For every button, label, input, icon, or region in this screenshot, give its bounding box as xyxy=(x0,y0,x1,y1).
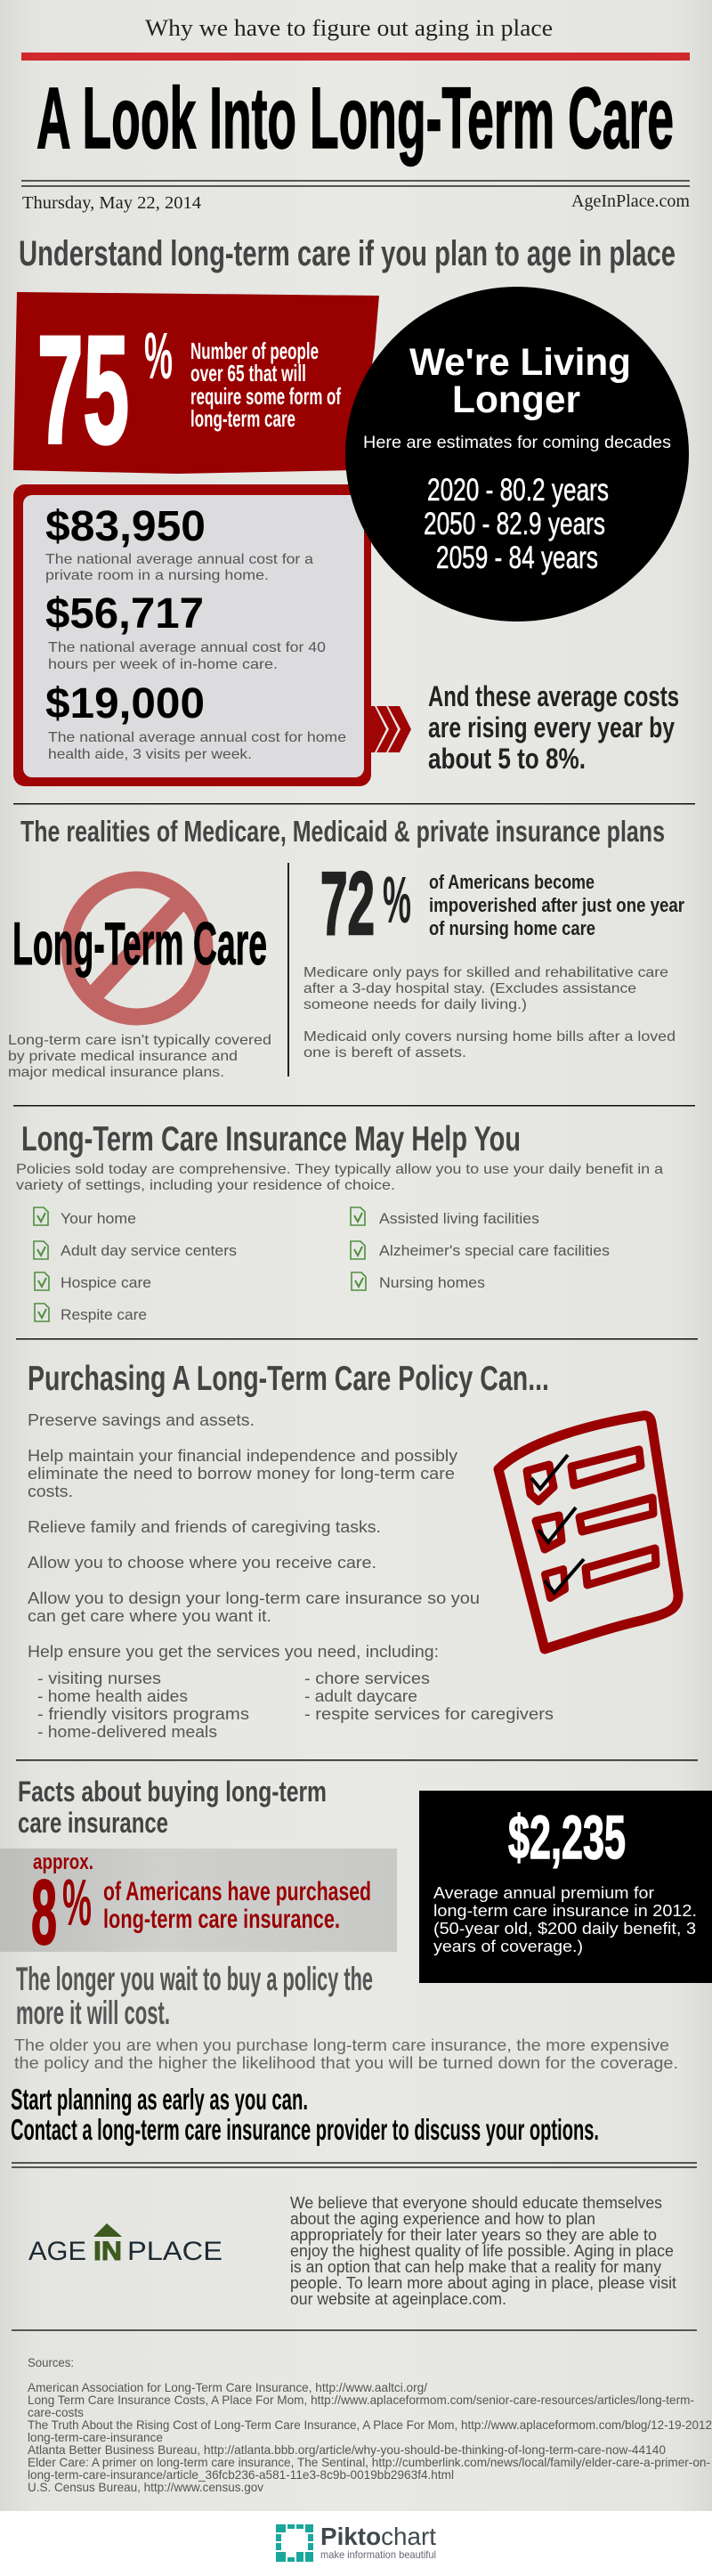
text: benefits: Allow you to choose where you receive care. xyxy=(28,1554,376,1572)
description: long-term care xyxy=(190,405,295,432)
heading: the longer you wait: more it will cost. xyxy=(16,1995,170,2031)
arrow: chevrons xyxy=(371,706,411,752)
heading: the longer you wait xyxy=(16,1961,373,2031)
item: nursing homes xyxy=(352,1272,485,1291)
panel: 8 percent xyxy=(0,1849,397,1963)
percent sign: % xyxy=(62,1865,92,1939)
heading: facts: care insurance xyxy=(18,1807,168,1839)
item: assisted living: Assisted living facilities xyxy=(379,1210,539,1227)
item: nursing homes: Nursing homes xyxy=(379,1274,485,1291)
logo: age in place: IN xyxy=(93,2237,122,2266)
heading: the longer you wait: The longer you wait to buy a policy the xyxy=(16,1961,373,1997)
text: benefits: Help ensure you get the services you need, including: xyxy=(28,1643,439,1661)
sources: Elder Care: A primer on long-term care insurance, The Sentinal, http://cumberlink.com/news/local/family/elder-care-a-primer-on- xyxy=(28,2455,710,2469)
sources: Sources: xyxy=(28,2355,74,2369)
text: benefits: Help maintain your financial independence and possibly xyxy=(28,1447,457,1465)
text: benefits: Preserve savings and assets. xyxy=(28,1411,255,1429)
stat text: of nursing home care xyxy=(429,917,595,939)
text: medicaid: one is bereft of assets. xyxy=(303,1045,466,1060)
logo: age in place: PLACE xyxy=(127,2237,222,2266)
cost 1 text: private room in a nursing home. xyxy=(45,568,269,583)
cost 3: $19,000 xyxy=(45,680,205,727)
text: about: our website at ageinplace.com. xyxy=(290,2290,506,2308)
item: respite xyxy=(35,1304,147,1323)
heading: insurance may help: Long-Term Care Insurance May Help You xyxy=(21,1120,521,1158)
logo: age in place: AGE xyxy=(28,2237,86,2266)
text: the older you are: The older you are when you purchase long-term care insurance, the more expensive xyxy=(14,2036,669,2054)
list: services left: - home health aides xyxy=(37,1687,188,1705)
item: alzheimer's: Alzheimer's special care facilities xyxy=(379,1242,610,1259)
cost 3 text: health aide, 3 visits per week. xyxy=(48,747,252,762)
text: the older you are xyxy=(14,2036,678,2072)
number 72: 72 xyxy=(320,854,375,954)
cost 1 text: The national average annual cost for a xyxy=(45,552,313,567)
stat text: of Americans become xyxy=(429,871,595,893)
cost 2: $56,717 xyxy=(45,590,204,638)
stat text: of Americans have purchased xyxy=(103,1877,371,1906)
panel: 75 percent: % xyxy=(144,319,173,393)
estimates xyxy=(424,473,609,575)
stat text xyxy=(103,1877,371,1934)
item: hospice: Hospice care xyxy=(61,1274,151,1291)
list: services left: - friendly visitors programs xyxy=(37,1705,249,1723)
text: medicare: Medicare only pays for skilled and rehabilitative care xyxy=(303,965,668,980)
label: long-term care: Long-Term Care xyxy=(12,910,267,978)
kicker: Why we have to figure out aging in place xyxy=(145,15,553,41)
text: about: We believe that everyone should educate themselves xyxy=(290,2194,662,2212)
description: Number of people xyxy=(190,337,319,364)
piktochart tagline: make information beautiful xyxy=(320,2548,436,2561)
list: services left: - home-delivered meals xyxy=(37,1723,217,1741)
call to action: Start planning as early as you can. xyxy=(11,2083,308,2116)
text: about: is an option that can help make that a reality for many xyxy=(290,2258,661,2276)
text: medicare xyxy=(303,965,668,1012)
heading: facts: Facts about buying long-term xyxy=(18,1776,327,1808)
sources xyxy=(28,2355,712,2494)
description xyxy=(190,337,341,432)
estimates: 2059 - 84 years xyxy=(436,540,598,575)
premium text: long-term care insurance in 2012. xyxy=(433,1902,697,1920)
description: require some form of xyxy=(190,383,341,410)
sources: American Association for Long-Term Care Insurance, http://www.aaltci.org/ xyxy=(28,2380,427,2394)
cost 2 text xyxy=(48,640,326,672)
piktochart wordmark: Piktochart xyxy=(320,2523,436,2550)
circle heading: Longer xyxy=(452,378,580,421)
estimates: 2020 - 80.2 years xyxy=(427,473,609,508)
list: services right: - adult daycare xyxy=(304,1687,417,1705)
text: rising costs: about 5 to 8%. xyxy=(428,743,586,775)
premium text: (50-year old, $200 daily benefit, 3 xyxy=(433,1920,696,1938)
checklist: settings xyxy=(34,1207,610,1323)
text: about xyxy=(290,2194,676,2308)
sources: U.S. Census Bureau, http://www.census.gov xyxy=(28,2480,263,2494)
stat: 72 percent xyxy=(320,854,684,954)
premium text: years of coverage.) xyxy=(433,1938,583,1955)
sources: Atlanta Better Business Bureau, http://atlanta.bbb.org/article/why-you-should-be-thinking-of-long-term-care-now-44140 xyxy=(28,2442,666,2457)
item: hospice xyxy=(35,1272,151,1291)
text: not covered xyxy=(8,1033,271,1080)
call to action xyxy=(11,2083,599,2146)
text: not covered: by private medical insurance and xyxy=(8,1049,238,1064)
text: about: appropriately for their later years so they are able to xyxy=(290,2226,657,2244)
text: not covered: Long-term care isn't typically covered xyxy=(8,1033,271,1048)
text: rising costs xyxy=(428,680,679,775)
premium text xyxy=(433,1884,697,1955)
logo: age in place xyxy=(28,2223,222,2266)
text: benefits: can get care where you want it. xyxy=(28,1607,271,1625)
circle: we're living longer xyxy=(345,287,689,622)
premium amount: $2,235 xyxy=(508,1803,626,1872)
cost 3 text xyxy=(48,730,346,762)
panel: costs xyxy=(13,484,371,786)
text: benefits: Relieve family and friends of caregiving tasks. xyxy=(28,1518,381,1536)
text: medicare: after a 3-day hospital stay. (Excludes assistance xyxy=(303,981,636,996)
number 8: 8 xyxy=(31,1861,57,1963)
cost 1 text xyxy=(45,552,313,583)
item: adult day: Adult day service centers xyxy=(61,1242,237,1259)
logo: piktochart xyxy=(276,2523,436,2562)
text: policies xyxy=(16,1162,663,1193)
date: Thursday, May 22, 2014 xyxy=(22,193,201,213)
text: medicaid xyxy=(303,1029,676,1060)
list: services left: - visiting nurses xyxy=(37,1670,161,1687)
stat text xyxy=(429,871,684,939)
description: over 65 that will xyxy=(190,360,306,386)
item: respite: Respite care xyxy=(61,1306,147,1323)
piktochart mark xyxy=(276,2524,313,2562)
cost 1: $83,950 xyxy=(45,503,206,550)
text: benefits xyxy=(28,1411,480,1661)
text: benefits: eliminate the need to borrow money for long-term care xyxy=(28,1465,455,1483)
panel: average premium xyxy=(419,1791,712,1983)
text: about: enjoy the highest quality of life possible. Aging in place xyxy=(290,2242,674,2260)
stat: 72 percent: % xyxy=(383,863,411,937)
text: about: people. To learn more about aging in place, please visit xyxy=(290,2274,676,2292)
estimates: 2050 - 82.9 years xyxy=(424,507,605,541)
text: policies: Policies sold today are comprehensive. They typically allow you to use your daily benefit in a xyxy=(16,1162,663,1177)
panel: 75 percent xyxy=(13,292,379,475)
icon: clipboard checklist xyxy=(498,1416,678,1649)
sources: Long Term Care Insurance Costs, A Place For Mom, http://www.aplaceformom.com/senior-care-resources/articles/long-term- xyxy=(28,2393,694,2407)
footer band xyxy=(0,2511,712,2576)
heading: facts xyxy=(18,1776,327,1839)
list: services left xyxy=(37,1670,249,1741)
circle subheading: Here are estimates for coming decades xyxy=(363,434,671,452)
sources: care-costs xyxy=(28,2405,84,2419)
approx: approx. xyxy=(33,1850,93,1874)
text: benefits: Allow you to design your long-term care insurance so you xyxy=(28,1589,480,1607)
sources: long-term-care-insurance xyxy=(28,2430,163,2444)
sources: long-term-care-insurance/article_36fcb236-a581-11e3-8c9b-0019bb2963f4.html xyxy=(28,2467,454,2482)
cost 3 text: The national average annual cost for home xyxy=(48,730,346,745)
circle heading: We're Living xyxy=(409,341,631,384)
item: your home xyxy=(34,1207,136,1227)
text: not covered: major medical insurance plans. xyxy=(8,1065,224,1080)
number 75: 75 xyxy=(37,305,129,475)
circle heading xyxy=(409,341,631,421)
stat text: long-term care insurance. xyxy=(103,1905,340,1934)
text: about: about the aging experience and how to plan xyxy=(290,2210,595,2228)
text: medicaid: Medicaid only covers nursing home bills after a loved xyxy=(303,1029,676,1044)
red rule xyxy=(21,53,690,61)
list: services right: - respite services for caregivers xyxy=(304,1705,554,1723)
premium text: Average annual premium for xyxy=(433,1884,654,1902)
text: policies: variety of settings, including your residence of choice. xyxy=(16,1178,395,1193)
list: services right: - chore services xyxy=(304,1670,430,1687)
site name: AgeInPlace.com xyxy=(571,191,690,211)
cost 2 text: hours per week of in-home care. xyxy=(48,657,278,672)
text: the older you are: the policy and the higher the likelihood that you will be turned down for the coverage. xyxy=(14,2054,678,2072)
icon: prohibition sign xyxy=(69,880,205,1017)
text: benefits: costs. xyxy=(28,1483,73,1500)
cost 2 text: The national average annual cost for 40 xyxy=(48,640,326,655)
masthead xyxy=(21,15,690,213)
text: medicare: someone needs for daily living.) xyxy=(303,997,527,1012)
list: services right xyxy=(304,1670,554,1723)
item: your home: Your home xyxy=(61,1210,136,1227)
